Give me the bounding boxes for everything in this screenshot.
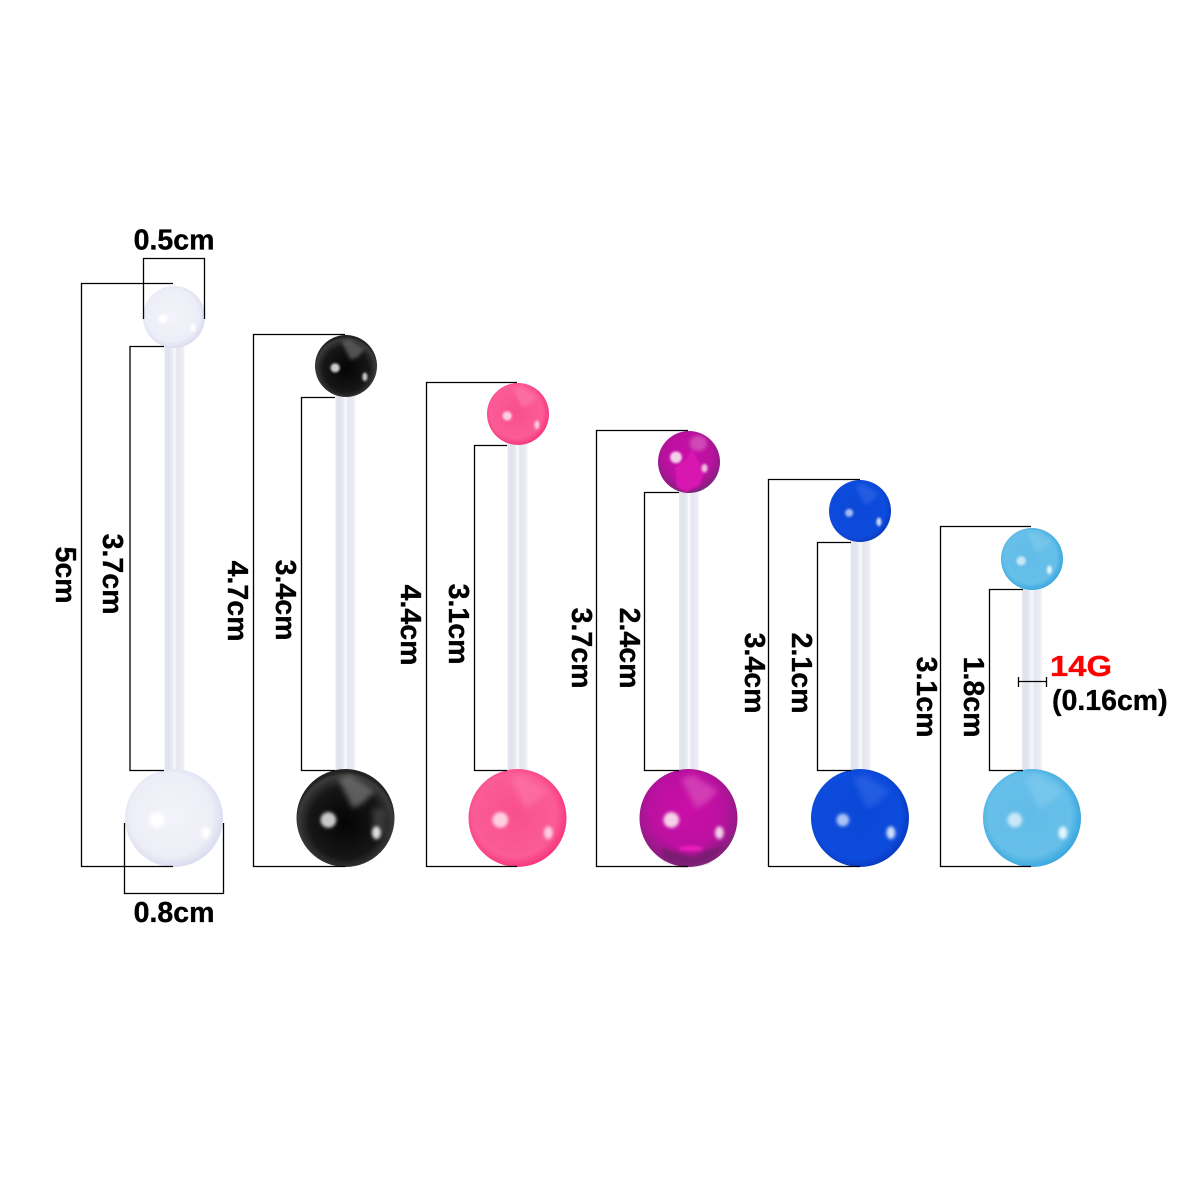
large sky blue ball xyxy=(983,769,1081,867)
label: total length 3.4cm: 3.4cm xyxy=(738,633,770,713)
large black ball xyxy=(296,769,394,867)
stem xyxy=(336,390,356,776)
stem xyxy=(679,486,699,776)
label: total length 3.1cm: 3.1cm xyxy=(910,657,942,737)
label: top ball diameter: 0.5cm xyxy=(134,224,214,256)
barbell 3: pink xyxy=(468,383,566,867)
label: bar length 1.8cm: 1.8cm xyxy=(957,657,989,737)
stem xyxy=(164,340,184,776)
small sky blue ball xyxy=(1001,528,1063,590)
large blue ball xyxy=(811,769,909,867)
large purple ball xyxy=(640,769,738,867)
dimension brackets xyxy=(82,258,1046,894)
small pink ball xyxy=(487,383,549,445)
label: gauge 14G: 14G xyxy=(1050,651,1112,683)
barbell 5: blue xyxy=(811,480,909,867)
label: total length 3.7cm: 3.7cm xyxy=(565,608,597,688)
barbell 6: sky blue xyxy=(983,528,1081,867)
barbell 4: purple xyxy=(640,431,738,867)
small black ball xyxy=(315,335,377,397)
label: bar length 3.4cm: 3.4cm xyxy=(269,560,301,640)
label: bar length 2.1cm: 2.1cm xyxy=(785,633,817,713)
stem xyxy=(850,535,870,776)
small white ball xyxy=(143,286,205,348)
stem xyxy=(508,438,528,776)
label: bar length 2.4cm: 2.4cm xyxy=(613,608,645,688)
label: bar length 3.1cm: 3.1cm xyxy=(442,584,474,664)
small purple ball xyxy=(658,431,720,493)
barbell 2: black xyxy=(296,335,394,867)
label: total length 4.4cm: 4.4cm xyxy=(394,585,426,665)
label: gauge width: (0.16cm) xyxy=(1052,685,1168,717)
barbell 1: white xyxy=(125,286,223,867)
small blue ball xyxy=(829,480,891,542)
label: bottom ball diameter: 0.8cm xyxy=(134,897,214,929)
stem xyxy=(1022,582,1042,776)
label: total length 4.7cm: 4.7cm xyxy=(221,561,253,641)
large white ball xyxy=(125,769,223,867)
label: bar length 3.7cm: 3.7cm xyxy=(96,534,128,614)
label: total length 5cm: 5cm xyxy=(49,546,81,604)
large pink ball xyxy=(468,769,566,867)
